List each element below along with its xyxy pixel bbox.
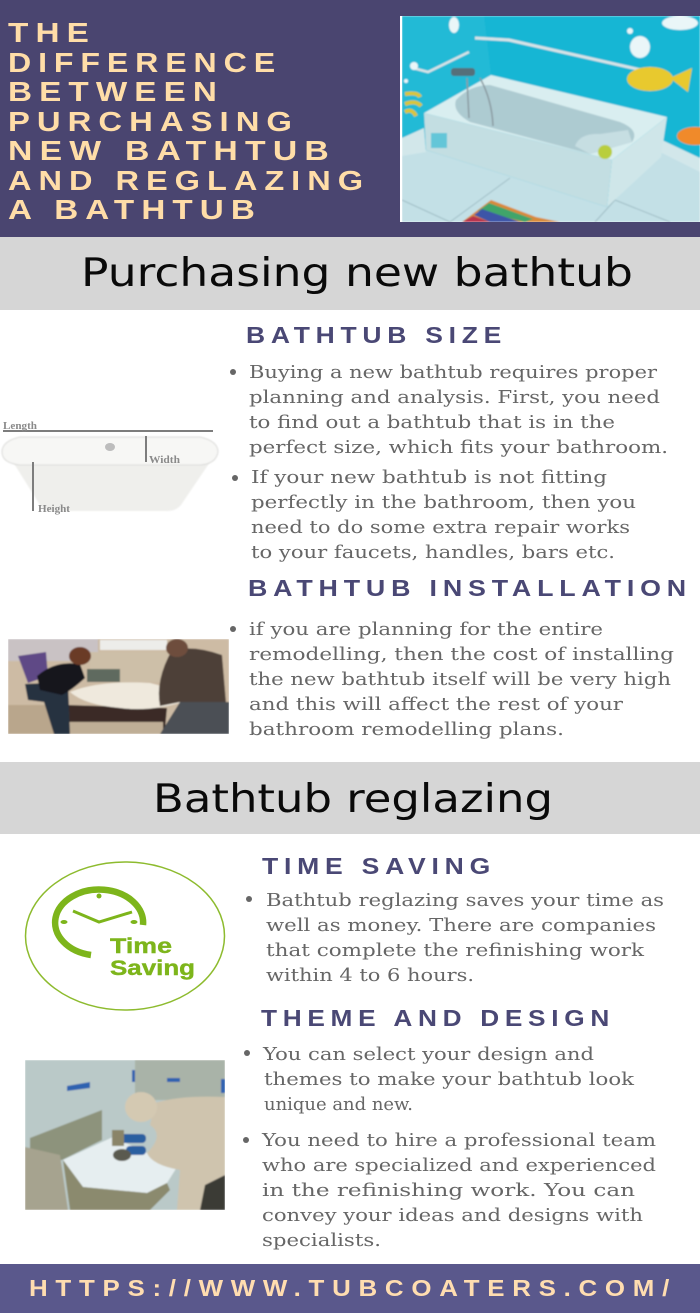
bullet list: installation: if you are planning for the entire [249,619,603,640]
bullet list: theme and design: themes to make your bathtub look [264,1069,635,1090]
bullet list: size: If your new bathtub is not fitting [251,467,607,488]
title: A BATHTUB [8,194,262,225]
footer url text: HTTPS://WWW.TUBCOATERS.COM/ [29,1275,677,1301]
bullet list: size: Buying a new bathtub requires proper [249,362,657,383]
title: NEW BATHTUB [8,135,336,166]
bullet list: theme and design: who are specialized and experienced [262,1155,656,1176]
bullet list: theme and design: convey your ideas and designs with [262,1205,643,1226]
bullet list: size: need to do some extra repair works [251,517,630,538]
bullet list: theme and design: in the refinishing work. You can [262,1180,636,1201]
icon: time saving clock: Saving [110,957,195,980]
bullet list: theme and design: You can select your design and [262,1044,594,1065]
bullet list: theme and design [243,1044,656,1251]
panel: footer url [0,1264,700,1313]
title: PURCHASING [8,106,299,137]
heading: bathtub reglazing: Bathtub reglazing [153,777,553,822]
heading: purchasing new bathtub: Purchasing new bathtub [81,251,633,296]
bullet list: size: to your faucets, handles, bars etc. [251,542,615,563]
bullet list: theme and design: You need to hire a professional team [261,1130,656,1151]
section: time saving [246,853,664,986]
section: theme and design [243,1005,656,1251]
bullet list: size: perfect size, which fits your bathroom. [249,437,668,458]
subheading: bathtub installation: BATHTUB INSTALLATION [248,575,692,601]
diagram: bathtub dimensions: Height [38,503,70,515]
bullet list: installation: the new bathtub itself will be very high [249,669,671,690]
title: DIFFERENCE [8,47,282,78]
panel: heading band purchasing [0,237,700,310]
bullet list: time saving [246,890,664,986]
bullet list: time saving: within 4 to 6 hours. [266,965,474,986]
bullet list: size: planning and analysis. First, you need [249,387,660,408]
title: THE [8,17,96,48]
bullet list: size [230,362,668,563]
diagram: bathtub dimensions [2,420,218,515]
panel: heading band reglazing [0,762,700,834]
rug [462,200,560,222]
bullet list: time saving: that complete the refinishing work [266,940,645,961]
bullet list: installation: bathroom remodelling plans. [249,719,564,740]
title: BETWEEN [8,76,224,107]
section: bathtub installation [230,575,692,740]
bullet list: installation: remodelling, then the cost of installing [249,644,674,665]
icon: time saving clock [26,862,224,1010]
diagram: bathtub dimensions: Length [3,420,37,432]
photo: technician refinishing a bathtub [25,1060,225,1210]
subheading: theme and design: THEME AND DESIGN [261,1005,615,1031]
tub [424,75,667,160]
bullet list: installation [230,619,674,740]
bullet list: time saving: well as money. There are companies [266,915,656,936]
rails and faucet [413,52,469,72]
bullet list: installation: and this will affect the rest of your [249,694,623,715]
bullet list: theme and design: specialists. [262,1230,381,1251]
bullet list: theme and design: unique and new. [264,1094,413,1115]
title: AND REGLAZING [8,165,370,196]
bullet list: size: perfectly in the bathroom, then you [251,492,636,513]
photo: bathtub in teal bathroom [400,16,700,222]
bullet list: size: to find out a bathtub that is in the [249,412,615,433]
diagram: bathtub dimensions: Width [149,454,180,466]
title [8,17,370,225]
photo: couple installing a bathtub [8,639,229,734]
icon: time saving clock: Time [110,935,172,958]
bullet list: time saving: Bathtub reglazing saves your time as [266,890,664,911]
subheading: time saving: TIME SAVING [262,853,496,879]
panel: header banner [0,0,700,237]
wall decorations [404,16,700,145]
section: bathtub size [230,322,668,563]
subheading: bathtub size: BATHTUB SIZE [246,322,507,348]
